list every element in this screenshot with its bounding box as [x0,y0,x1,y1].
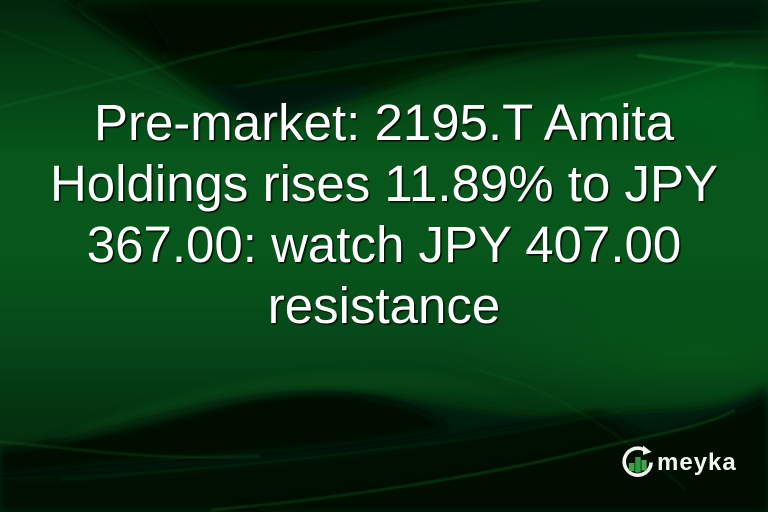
title: Holdings rises 11.89% to JPY [50,155,718,212]
title [50,94,718,334]
title: 367.00: watch JPY 407.00 [87,216,681,273]
right sweep up to the bright spot [470,62,768,150]
upper dark sweep [60,0,768,125]
logo: meyka [622,446,737,477]
icon: circular arrow with bars [624,446,652,475]
wordmark: meyka [657,449,737,476]
lower dark dome [0,385,768,512]
title: resistance [268,277,500,334]
title: Pre-market: 2195.T Amita [94,94,674,151]
green wave band over the dome [50,370,520,440]
wave lines [176,0,540,62]
